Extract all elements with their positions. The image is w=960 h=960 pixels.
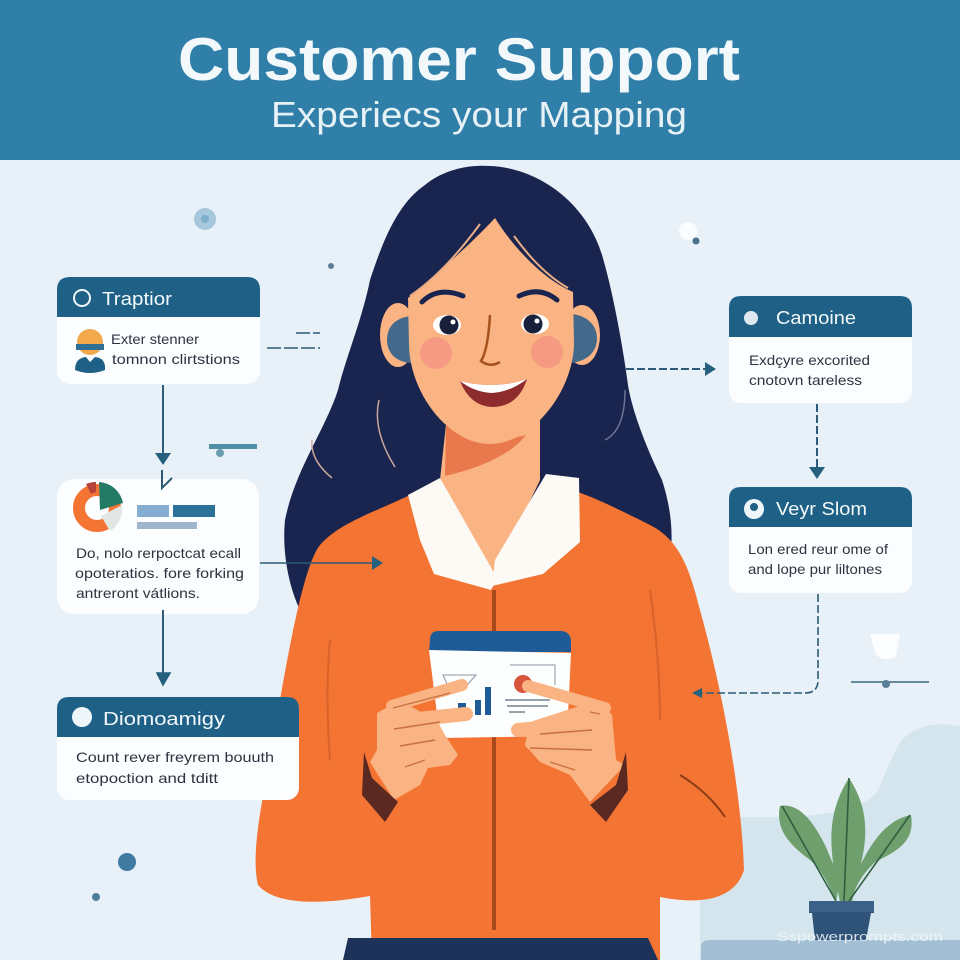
connector arrows <box>155 333 825 698</box>
right hand <box>518 686 625 802</box>
mouth <box>460 379 527 407</box>
card: Camoine: Exdçyre excorited <box>749 352 870 368</box>
nose <box>481 315 500 365</box>
card: Diomoamigy: etopoction and tditt <box>76 770 218 786</box>
headset cups <box>387 316 411 363</box>
background hill and shelf <box>700 724 960 960</box>
watermark: Sspowerprompts.com <box>777 929 943 944</box>
card: pie chart: Do, nolo rerpoctcat ecall <box>76 545 241 561</box>
collar <box>408 478 497 590</box>
header banner <box>0 0 960 160</box>
woman figure <box>256 166 744 960</box>
brows <box>422 292 463 302</box>
pants <box>343 938 658 960</box>
placket <box>492 590 496 930</box>
card: Veyr Slom <box>729 487 912 593</box>
card: Camoine <box>729 296 912 403</box>
title: Customer Support <box>178 26 740 93</box>
decorative dots <box>92 208 929 901</box>
neck <box>440 415 540 575</box>
icon: customer <box>77 329 103 355</box>
card: Veyr Slom: and lope pur liltones <box>748 561 882 577</box>
chart: donut <box>79 482 123 531</box>
card: pie chart: opoteratios. fore forking <box>75 565 244 581</box>
card <box>429 631 571 738</box>
icon: person <box>744 499 764 519</box>
card: pie chart: antreront vátlions. <box>76 585 200 601</box>
plant <box>779 778 912 940</box>
cuffs <box>362 752 398 822</box>
hair <box>284 166 672 610</box>
card: Traption: Traptior <box>102 289 172 309</box>
cheeks <box>420 337 452 369</box>
card: pie chart <box>57 479 259 614</box>
parting lines <box>410 224 568 296</box>
card: Traption: Exter stenner <box>111 331 199 347</box>
card: Diomoamigy <box>57 697 299 800</box>
left hand <box>370 685 466 800</box>
bars <box>137 505 169 517</box>
card: Traption: tomnon clirtstions <box>112 351 240 367</box>
card: Camoine: Camoine <box>776 308 856 328</box>
eyes <box>433 315 461 335</box>
subtitle: Experiecs your Mapping <box>271 94 687 135</box>
hair lines <box>312 400 395 478</box>
card: Veyr Slom: Veyr Slom <box>776 499 867 519</box>
card: Traption <box>57 277 260 384</box>
card: Camoine: cnotovn tareless <box>749 372 862 388</box>
icon: agent <box>744 311 758 325</box>
icon: agent <box>74 290 90 306</box>
card: Veyr Slom: Lon ered reur ome of <box>748 541 888 557</box>
card: Diomoamigy: Diomoamigy <box>103 709 225 729</box>
ears <box>380 303 416 367</box>
face <box>408 218 574 444</box>
pot <box>809 901 874 940</box>
card: Diomoamigy: Count rever freyrem bouuth <box>76 749 274 765</box>
icon: globe <box>72 707 92 727</box>
shirt <box>256 492 744 960</box>
